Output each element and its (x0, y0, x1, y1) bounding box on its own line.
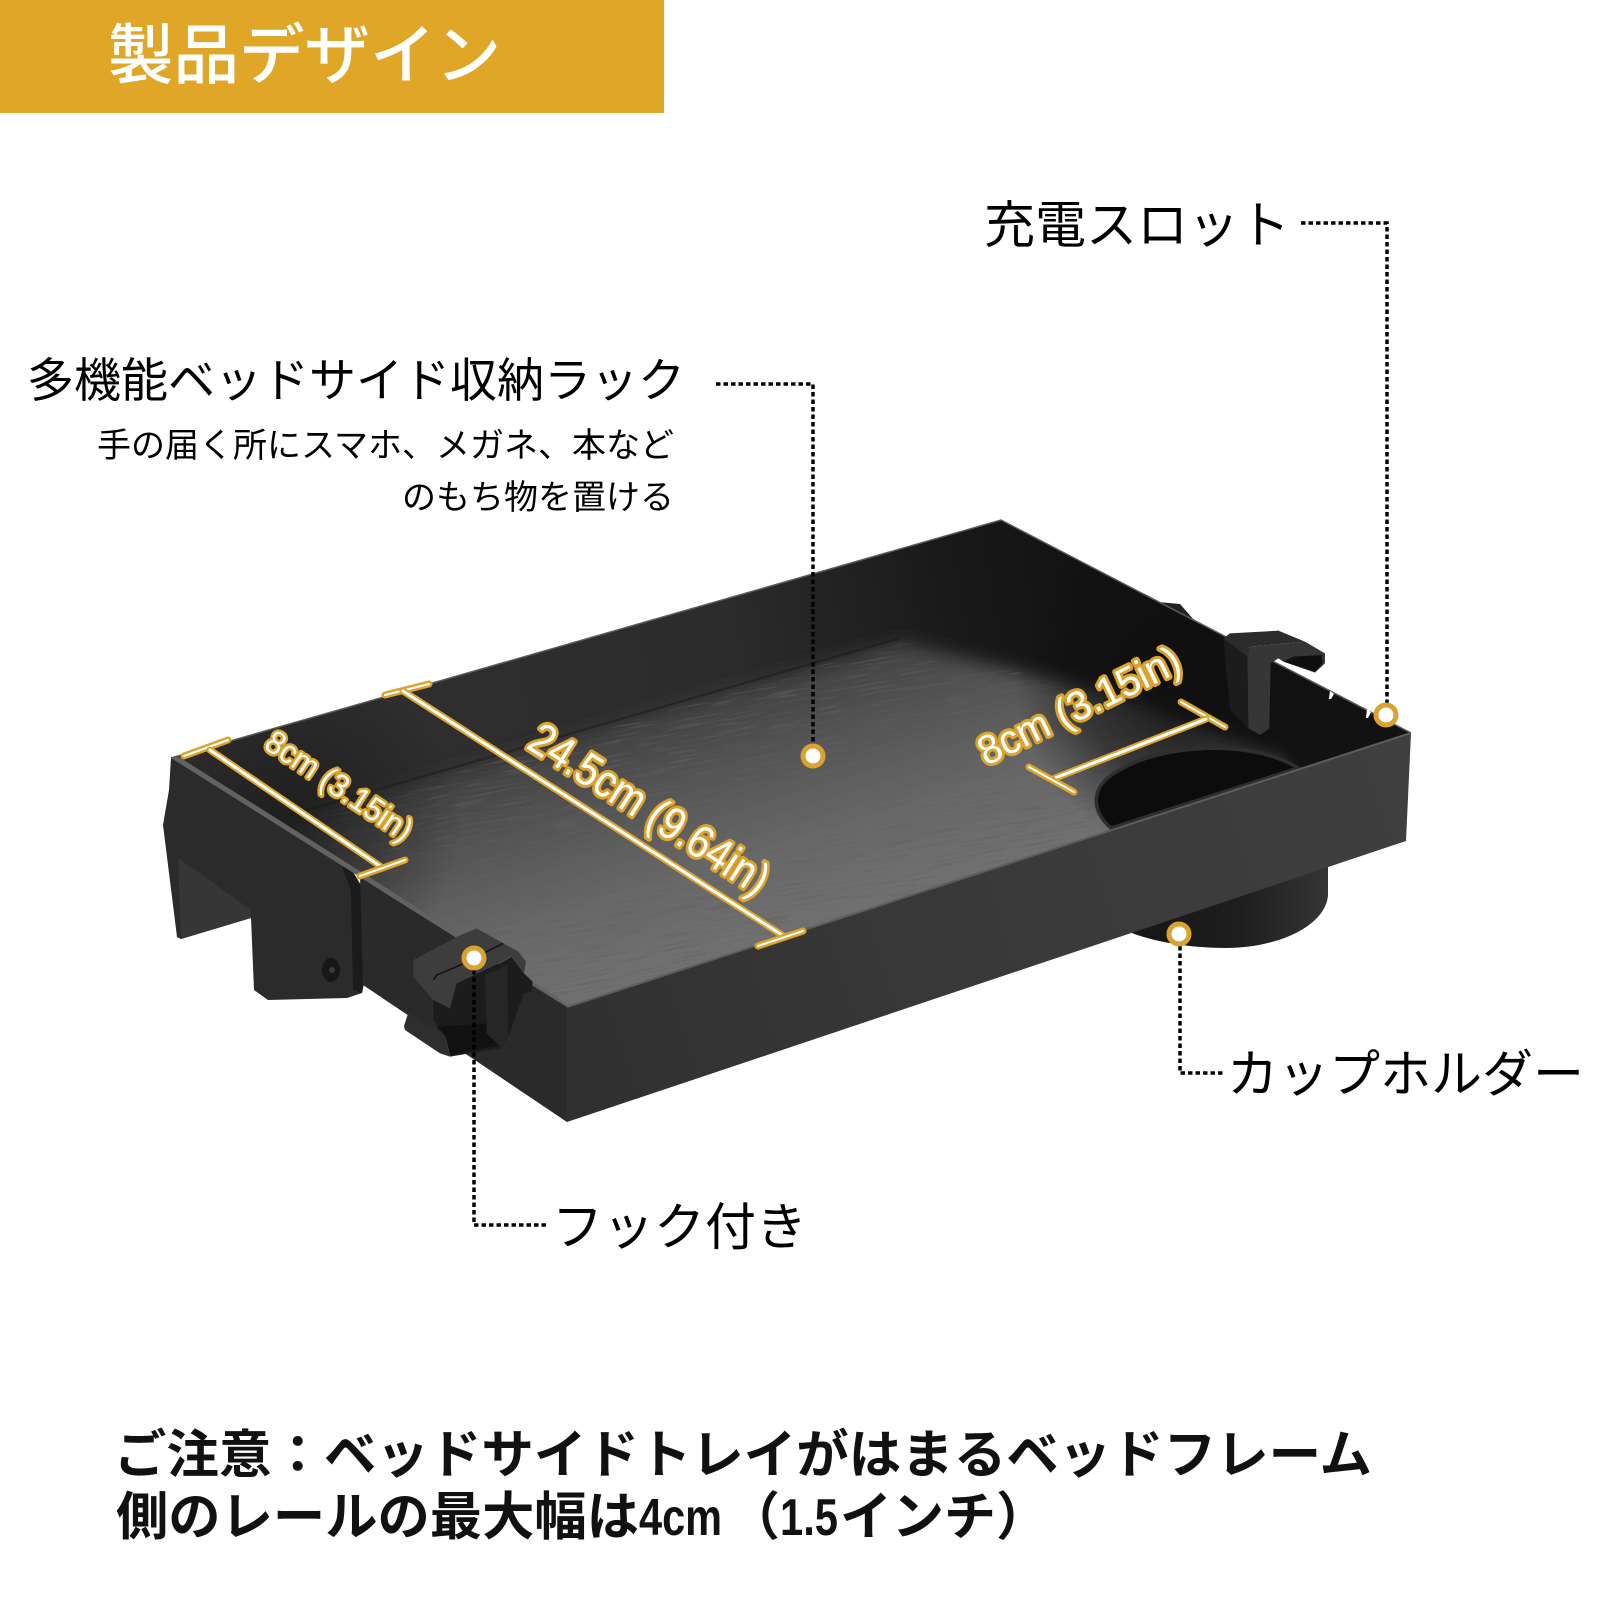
leader line (474, 970, 546, 1225)
label: 8cm left: 8cm (3.15in) (259, 723, 420, 848)
description text: のもち物を置ける (402, 470, 674, 519)
cup hole (1096, 748, 1298, 828)
clamp screw (322, 958, 340, 982)
back ledge line (371, 640, 898, 792)
marker dot (1376, 705, 1396, 725)
leader line (716, 384, 813, 744)
callout: charging slot (984, 184, 1396, 725)
note text: 4cm (639, 1489, 722, 1547)
label: 24.5cm: 24.5cm (9.64in) (520, 712, 780, 905)
leader line (1301, 223, 1387, 703)
front left wall (360, 877, 567, 1122)
marker dot (803, 746, 823, 766)
back rim highlight (171, 520, 1411, 758)
tray interior (172, 520, 1409, 1007)
marker dot (1169, 924, 1189, 944)
callout: multifunction rack (27, 342, 823, 766)
rear wall slot notches (1329, 691, 1371, 718)
wood grain (342, 642, 1106, 994)
cup holder underside (1132, 860, 1328, 948)
left clamp face (163, 758, 364, 1000)
front right wall (567, 733, 1411, 1122)
note text: ） (996, 1489, 1048, 1547)
clamp side edge (343, 862, 364, 993)
label: 8cm right: 8cm (3.15in) (970, 637, 1188, 774)
right corner shadow (1029, 676, 1284, 812)
front rim highlight (567, 733, 1411, 1007)
marker dot (464, 948, 484, 968)
back right hook (1223, 631, 1325, 735)
label text: フック付き (552, 1186, 807, 1260)
heading: product design: 製品デザイン (108, 19, 501, 92)
note text: ご注意：ベッドサイドトレイがはまるベッドフレーム (114, 1427, 1372, 1485)
callout: cup holder (1169, 924, 1584, 1107)
leader line (1180, 946, 1223, 1073)
note text: 側のレールの最大幅は (116, 1489, 639, 1547)
clamp inner shading (178, 858, 251, 939)
small bump on back wall (1158, 602, 1194, 620)
inner walls (160, 510, 1420, 1020)
front left hook (404, 928, 533, 1057)
note text: インチ (840, 1489, 996, 1547)
dimension: 8cm left (184, 723, 420, 876)
label text: カップホルダー (1227, 1033, 1584, 1107)
dimension: 24.5cm (385, 684, 803, 946)
left rim strip (171, 757, 567, 1007)
description text: 手の届く所にスマホ、メガネ、本など (97, 418, 674, 467)
heading text: 多機能ベッドサイド収納ラック (27, 342, 685, 411)
left corner shadow (214, 737, 430, 902)
note text: （ (728, 1489, 780, 1547)
floor wood surface (315, 638, 1291, 1006)
callout: with hooks (464, 948, 807, 1260)
label text: 充電スロット (984, 184, 1290, 258)
product photo: bedside tray (163, 519, 1412, 1122)
note text (114, 1427, 1372, 1547)
note text: 1.5 (780, 1489, 838, 1547)
header banner (0, 0, 664, 113)
dimension: 8cm right (970, 637, 1225, 792)
